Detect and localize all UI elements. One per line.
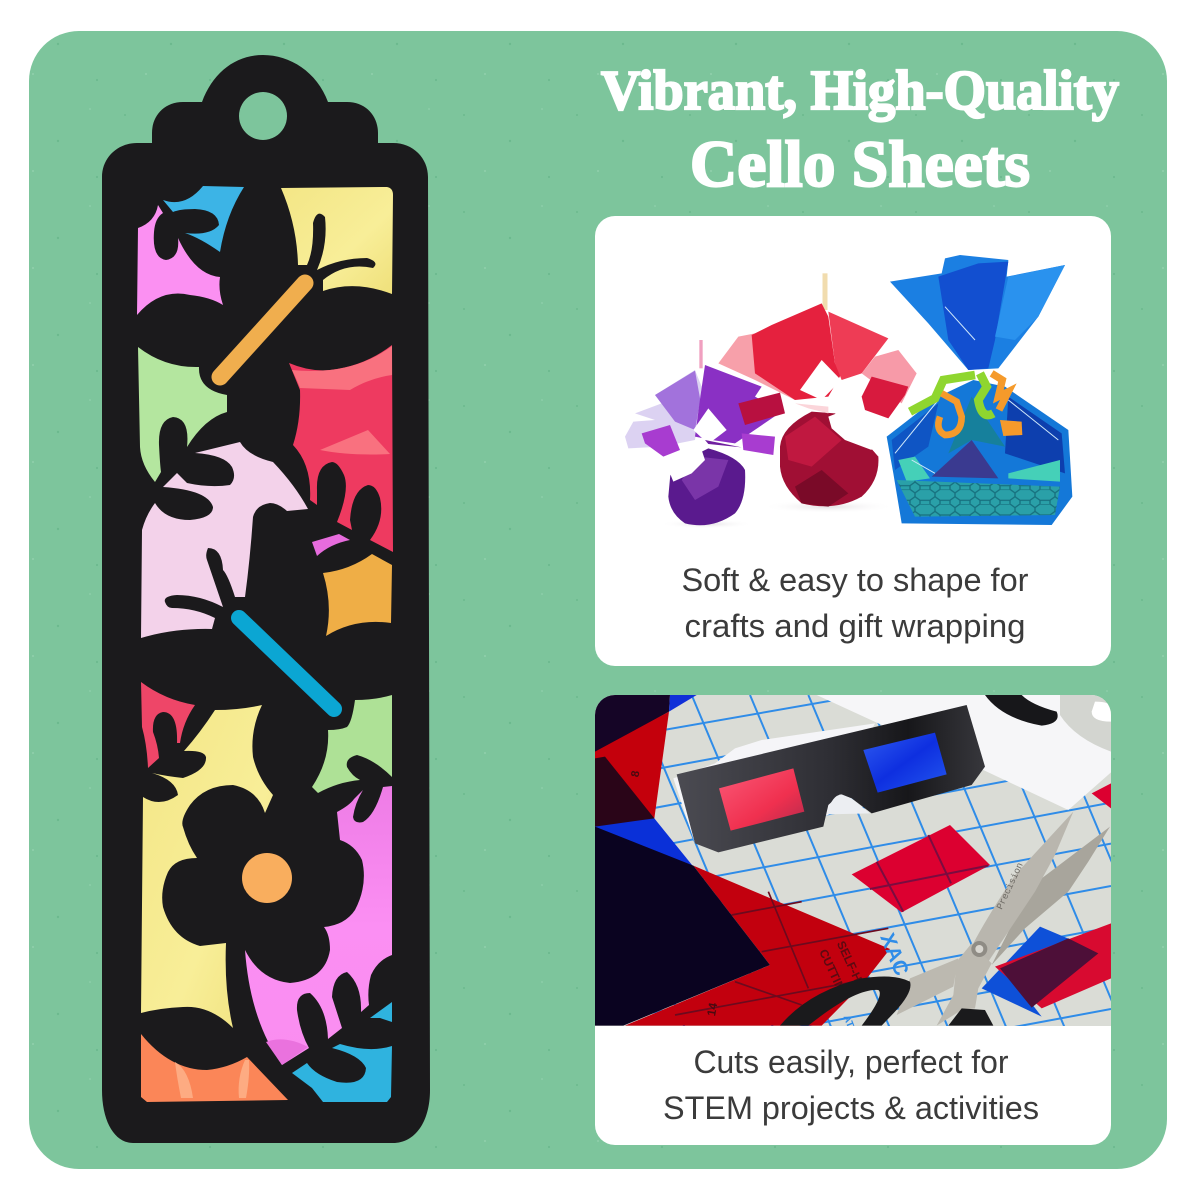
scissors: Precision <box>994 861 1026 911</box>
caption: Cuts easily, perfect for <box>694 1044 1009 1080</box>
notch paper <box>827 794 870 814</box>
soft floor shadows <box>762 500 895 513</box>
large navy sheet <box>595 827 770 1026</box>
blue cello gift basket <box>887 255 1072 525</box>
black blob <box>985 695 1058 726</box>
caption <box>663 1044 1039 1126</box>
cutout: red <box>289 345 393 552</box>
large red sheet <box>625 866 890 1026</box>
title: Cello Sheets <box>690 128 1030 201</box>
photo: 3D glasses, scissors and cutting mat <box>595 695 1111 1026</box>
right cello shapes <box>982 927 1072 1017</box>
white paper <box>817 695 1111 810</box>
bookmark: black scalloped paper with stained-glass cutouts <box>102 55 430 1143</box>
cutout: yellow top <box>281 187 393 294</box>
red diamond <box>852 825 990 912</box>
cutout: green <box>138 347 227 482</box>
cutout: orange bottom <box>141 1034 288 1102</box>
cutout: pink top <box>137 205 223 315</box>
orange highlights <box>175 1060 249 1098</box>
panel: gift wrapping card <box>595 216 1111 666</box>
red highlight upper <box>292 346 392 390</box>
mat printing: AT <box>841 1014 855 1029</box>
caption: crafts and gift wrapping <box>684 608 1026 644</box>
top-left sheets <box>595 695 670 753</box>
cutout: lower red <box>141 682 195 768</box>
cutout: blue small right <box>370 1002 392 1022</box>
magenta lower shade <box>266 1039 308 1065</box>
title: Vibrant, High-Quality <box>601 60 1119 122</box>
photo: wrapped gifts <box>625 255 1072 529</box>
title <box>601 60 1119 201</box>
3D glasses frame <box>677 705 985 852</box>
caption: STEM projects & activities <box>663 1090 1039 1126</box>
panel: stem projects card <box>595 695 1111 1145</box>
caption: Soft & easy to shape for <box>682 562 1029 598</box>
flower center <box>242 853 292 903</box>
red lollipop gift <box>718 273 917 507</box>
mat printing: SELF-H <box>834 939 865 984</box>
gray mat corner <box>1060 695 1111 752</box>
red lens <box>719 768 804 831</box>
cutout: yellow center <box>141 705 273 1028</box>
purple lollipop gift <box>625 340 782 529</box>
red highlight streak <box>320 430 390 454</box>
cutout: magenta sliver <box>312 534 350 556</box>
cutout: pale pink <box>141 442 308 638</box>
cutout: blue bottom <box>292 1044 392 1102</box>
bookmark silhouette <box>102 55 430 1143</box>
mat printing: 8 <box>629 770 642 778</box>
mat printing: 14 <box>704 1001 720 1017</box>
butterfly body: blue <box>239 618 334 709</box>
mat printing <box>629 770 913 1029</box>
cutout: green right <box>312 695 392 793</box>
scissors <box>780 812 1110 1026</box>
cutout: magenta large <box>245 786 392 1065</box>
mat lines through red sheet <box>675 892 888 1015</box>
blue lens <box>863 733 947 793</box>
white glasses backing <box>673 723 875 843</box>
cutout: amber <box>323 554 392 636</box>
caption <box>682 562 1029 644</box>
butterfly body: orange <box>220 283 305 377</box>
mat printing: XAC <box>875 930 913 979</box>
cutout: blue top <box>163 186 244 252</box>
mat printing: CUTTIN <box>816 947 848 993</box>
